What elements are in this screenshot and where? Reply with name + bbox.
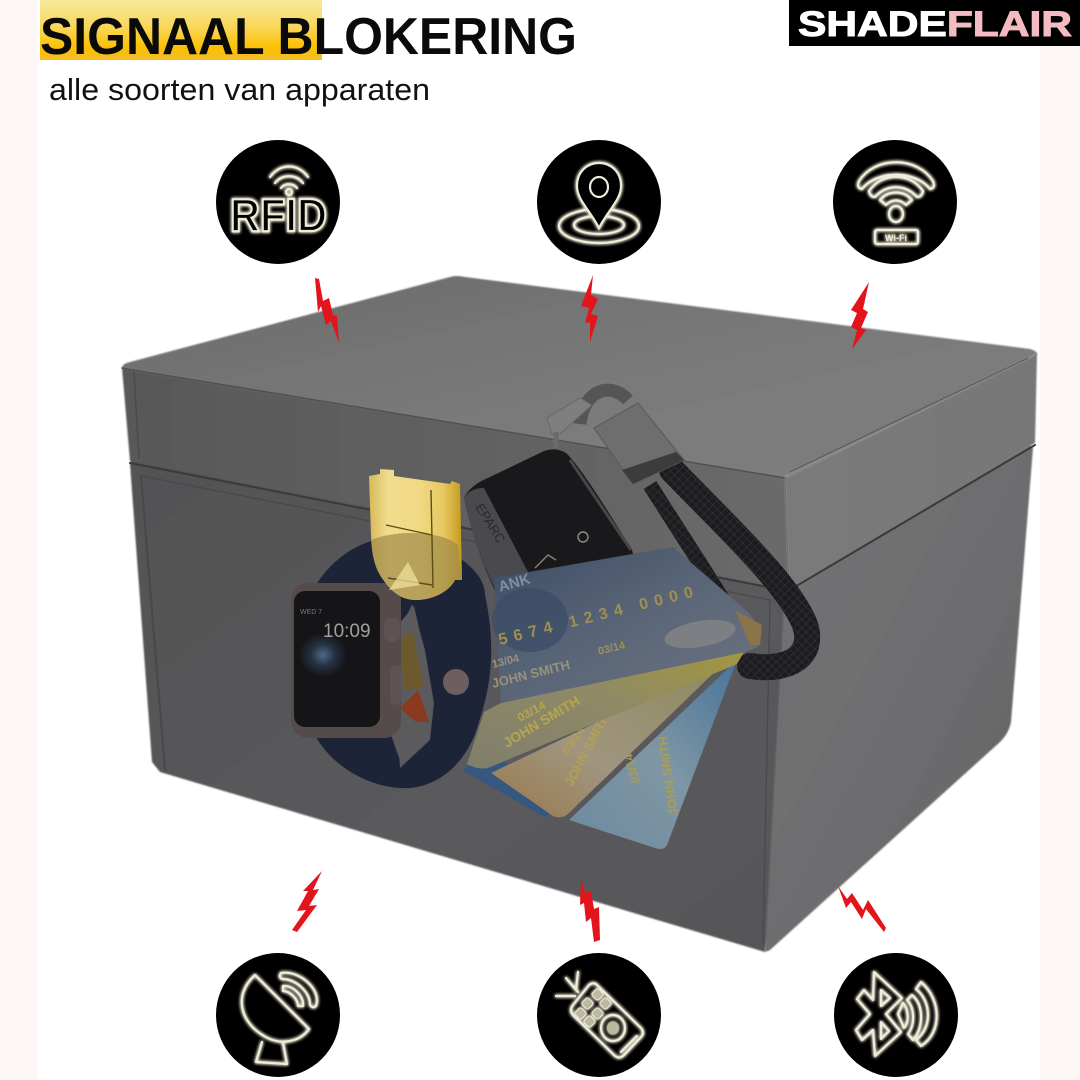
watch date: WED 7 xyxy=(300,609,322,616)
band gap background xyxy=(391,606,433,766)
bolt: remote xyxy=(580,878,600,942)
car key fob: EPARC xyxy=(472,501,508,546)
bolt: rfid xyxy=(315,278,339,343)
watch band stud xyxy=(443,669,469,695)
strap rope top xyxy=(580,390,628,424)
bolt: satellite xyxy=(292,871,322,932)
card: blue back xyxy=(462,752,560,818)
card: light blue: 03/14 xyxy=(621,752,643,785)
car key fob xyxy=(464,449,640,600)
card: blue bank: ANK xyxy=(496,570,533,596)
watch crown and button xyxy=(384,618,401,705)
icon: wifi xyxy=(833,140,957,264)
smartwatch xyxy=(291,538,491,788)
box body right side xyxy=(765,445,1033,952)
watch screen xyxy=(294,591,380,727)
metal clip xyxy=(547,398,592,434)
box lid front xyxy=(122,368,789,590)
credit cards fan xyxy=(462,547,762,849)
card: peach xyxy=(491,661,726,817)
card: peach: 03/14 xyxy=(559,724,588,757)
icon: bluetooth xyxy=(834,953,958,1077)
icon: gps pin xyxy=(537,140,661,264)
keychain strap xyxy=(547,390,807,667)
icon: rfid xyxy=(216,140,340,264)
icon: remote control xyxy=(537,953,661,1077)
watch band xyxy=(316,538,491,788)
bolt: gps xyxy=(581,275,598,342)
bolt: bluetooth xyxy=(838,886,886,932)
logo: shadeflair: SHADE FLAIR xyxy=(798,5,1072,44)
box lid right side xyxy=(785,354,1037,590)
icon: satellite dish xyxy=(216,953,340,1077)
icon: rfid: RFID xyxy=(230,189,327,241)
card: cream: JOHN SMITH xyxy=(500,692,583,751)
title: signaal blokering: SIGNAAL BLOKERING xyxy=(40,8,577,66)
signal bolts top xyxy=(315,275,869,349)
box: signal blocking box xyxy=(122,276,1037,952)
card: light blue xyxy=(569,660,737,849)
card: cream: 03/14 xyxy=(515,698,548,725)
band gap card scraps xyxy=(400,630,424,690)
card: blue bank: 03/14 xyxy=(597,639,627,658)
screen glow xyxy=(299,633,347,677)
box top face xyxy=(122,276,1037,480)
metal tube xyxy=(594,403,684,484)
bolt: wifi xyxy=(851,282,869,349)
icon: wifi: Wi-Fi xyxy=(885,233,907,243)
card: peach: JOHN SMITH xyxy=(561,711,612,788)
card: light blue: JOHN SMITH xyxy=(655,735,681,817)
strap outer rope xyxy=(672,470,807,667)
strap inner rope xyxy=(650,485,726,605)
card: blue bank: JOHN SMITH xyxy=(490,657,572,691)
card: blue bank xyxy=(490,547,762,703)
watch time: 10:09 xyxy=(323,621,371,642)
box seams xyxy=(122,354,1036,950)
subtitle: alle soorten van apparaten xyxy=(49,72,430,107)
box body front xyxy=(130,455,795,952)
card: cream xyxy=(467,652,744,768)
gold clasp xyxy=(369,469,462,600)
card: blue bank: 5674 1234 0000 xyxy=(497,584,695,649)
card: blue bank: 13/04 xyxy=(491,652,521,671)
signal bolts bottom xyxy=(292,871,886,942)
watch case xyxy=(291,583,401,738)
